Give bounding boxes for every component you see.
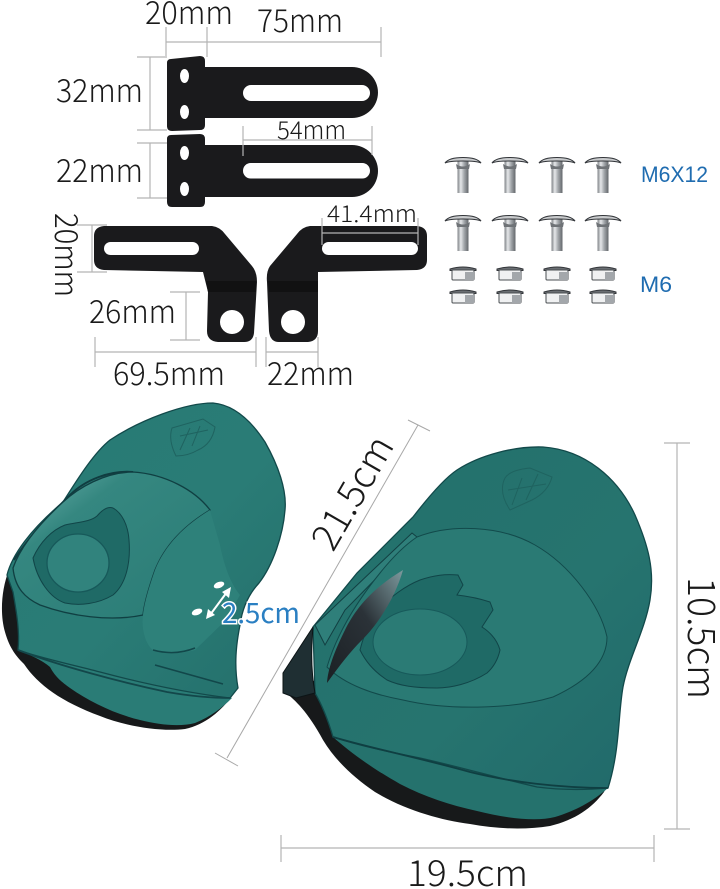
dimension: 19.5cm width — [281, 835, 654, 889]
right guard: black backing — [285, 680, 612, 828]
right guard: crease line — [333, 737, 608, 788]
left guard: black backing — [2, 570, 232, 730]
left guard: side channel — [143, 510, 240, 653]
dimension: 26mm: 26mm — [89, 287, 176, 333]
dimension: 20mm width — [145, 0, 233, 57]
bracket: left bent — [94, 226, 257, 342]
label: M6X12: M6X12 — [641, 162, 708, 187]
dimension: 21.5cm diagonal: 21.5cm — [295, 424, 405, 558]
left guard: crease line — [18, 650, 230, 698]
dimension: 54mm slot: 54mm — [277, 111, 346, 147]
left guard: upper ridge — [14, 472, 133, 560]
left guard: mounting holes — [191, 580, 225, 617]
right guard: mount circle — [373, 609, 467, 675]
bracket: right bent — [267, 226, 427, 342]
left hand guard — [2, 403, 300, 730]
right guard: main shell — [313, 447, 652, 789]
dimension: 10.5cm height — [664, 443, 720, 829]
screws: top row — [445, 158, 621, 193]
left guard: spacing arrow — [206, 587, 231, 619]
nuts: first row — [450, 267, 616, 280]
dimension: 22mm foot: 22mm — [267, 349, 354, 395]
right guard: dark side wedge — [283, 627, 315, 698]
label: M6: M6 — [640, 272, 672, 297]
screws: second row — [445, 216, 621, 251]
nuts: second row — [450, 290, 616, 303]
bracket: top straight — [167, 56, 378, 131]
dimension: 32mm height: 32mm — [56, 66, 143, 112]
bracket: second straight — [167, 134, 378, 207]
dimension: 41.4mm slot — [322, 195, 418, 245]
left guard: channel slit — [153, 648, 223, 684]
dimension: 2.5cm hole spacing: 2.5cm — [222, 592, 300, 632]
dimension: 22mm height — [56, 143, 167, 198]
right guard: mount plate — [360, 575, 500, 688]
left guard: inner dome — [13, 472, 210, 618]
left guard: mount circle — [47, 534, 109, 592]
right guard: inner dome — [327, 528, 607, 707]
dimension: 20mm bent bracket height: 20mm — [45, 213, 91, 297]
dimension: 75mm length — [207, 0, 381, 57]
dimension: 20mm bent bracket height — [45, 213, 107, 297]
dimension: 54mm slot — [243, 111, 372, 156]
left guard: main shell — [7, 403, 285, 698]
dimension: 21.5cm diagonal — [215, 420, 430, 766]
dimension: 69.5mm — [95, 337, 256, 395]
right guard: lower lip — [333, 737, 608, 819]
left guard: logo — [171, 419, 215, 456]
right hand guard — [283, 447, 652, 828]
right guard: glass streak — [327, 570, 403, 683]
right guard: upper ridge strip — [315, 533, 417, 645]
left guard: mount plate — [33, 507, 129, 604]
right guard: logo — [502, 468, 552, 510]
dimension: 41.4mm slot: 41.4mm — [327, 195, 417, 229]
dimension: 22mm height: 22mm — [56, 146, 143, 192]
dimension: 32mm height — [56, 57, 167, 130]
dimension: 69.5mm: 69.5mm — [113, 349, 225, 395]
left guard: lower lip — [18, 650, 232, 725]
